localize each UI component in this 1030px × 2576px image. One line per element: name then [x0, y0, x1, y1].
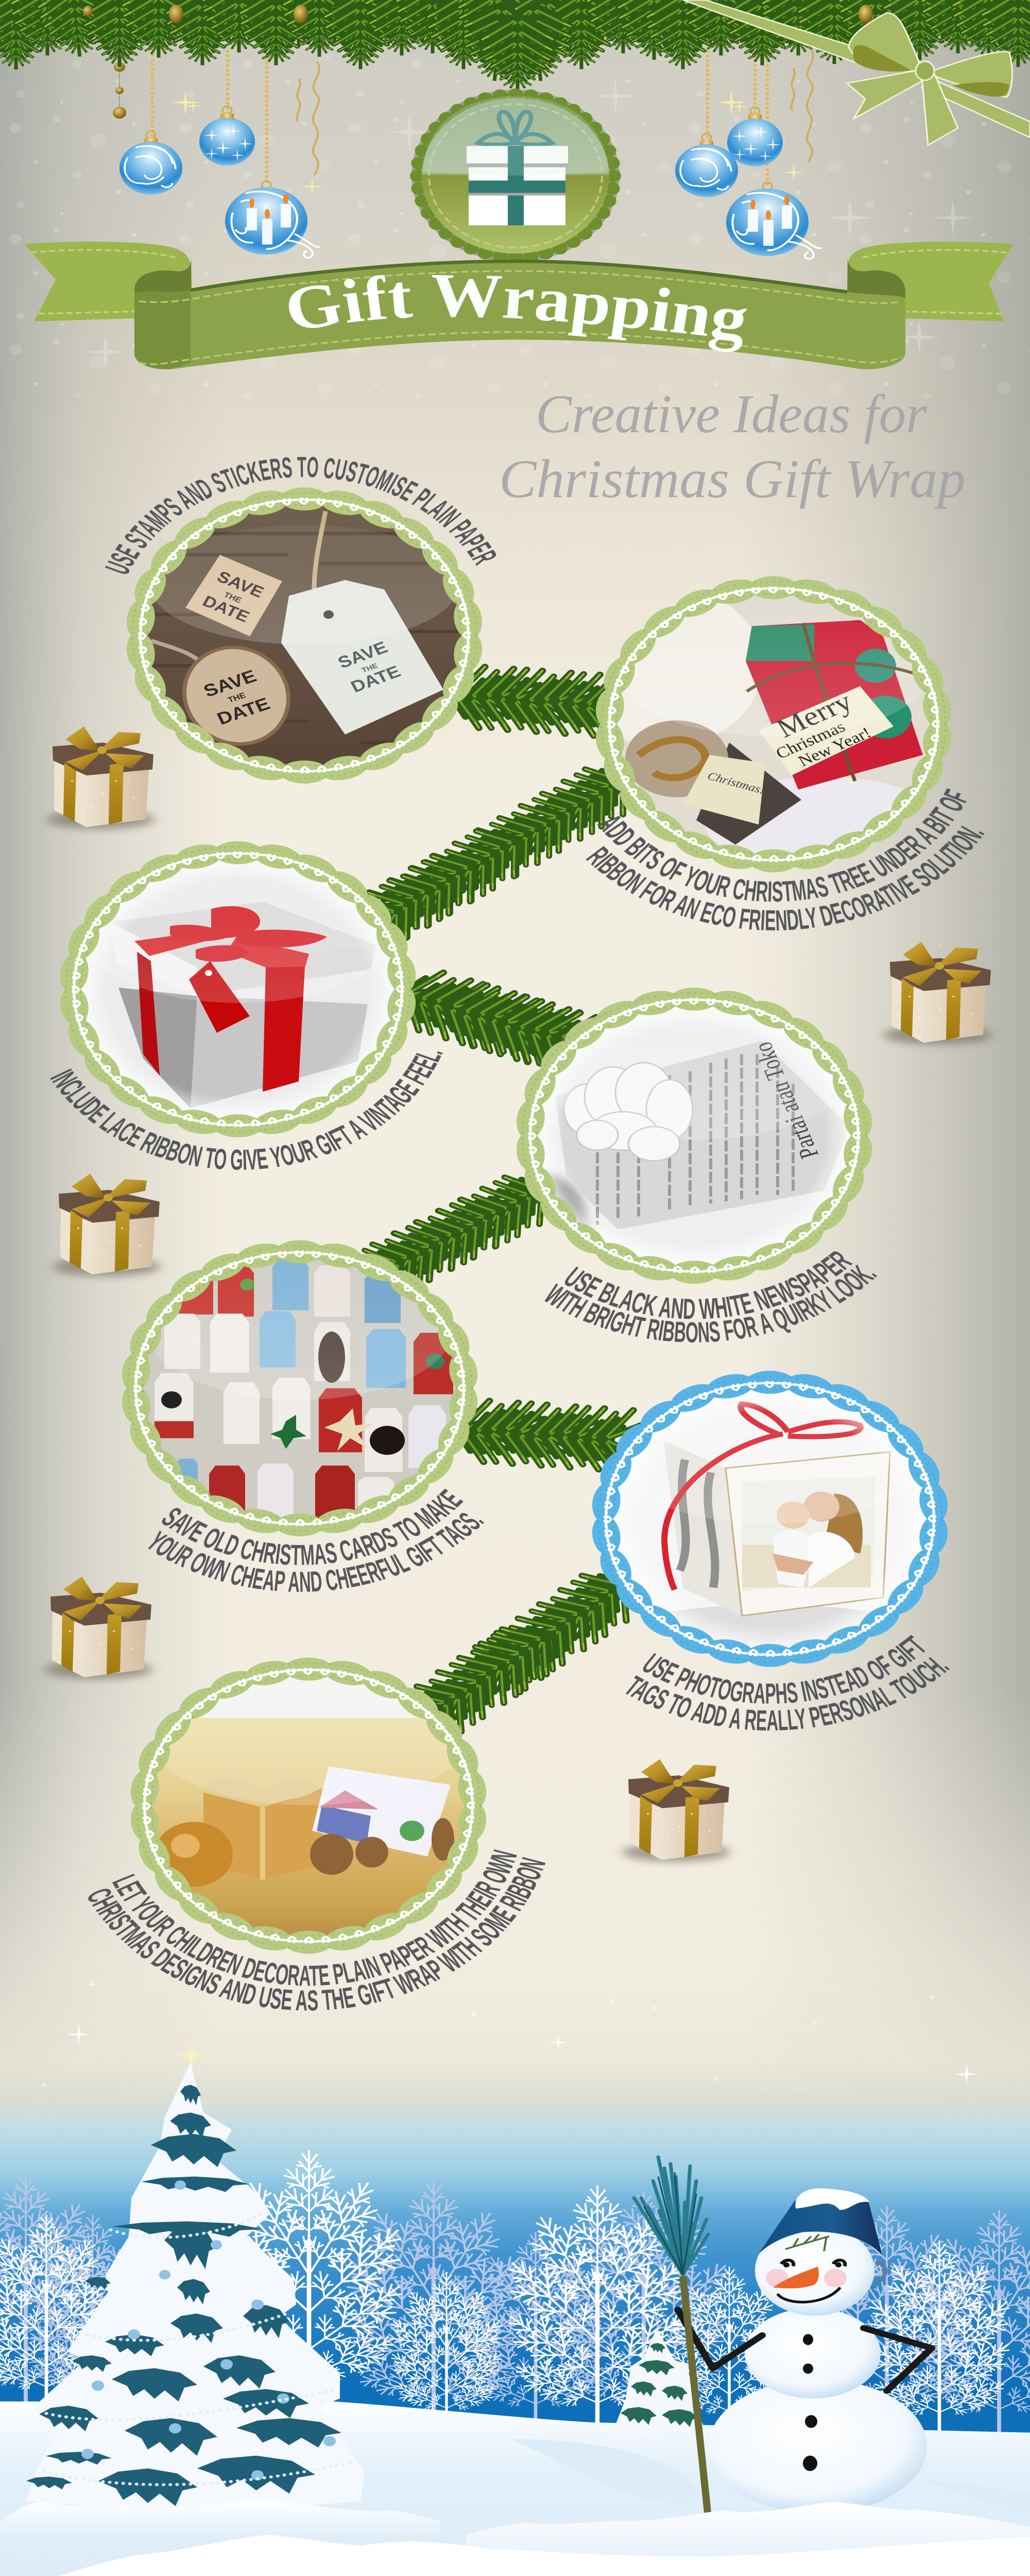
gift 5: [622, 1759, 730, 1861]
ball F: [726, 182, 821, 259]
gift 4: [44, 1577, 152, 1679]
panel 2: Christmas tree bits: [586, 576, 985, 930]
bead strings: [152, 50, 767, 184]
title text: Gift Wrapping: [288, 275, 747, 352]
gold curls: [297, 49, 813, 175]
connector 3 to 4: [390, 964, 632, 1086]
photo: stamped tags on wood: THE: [360, 662, 380, 674]
scalloped ring: [586, 567, 961, 882]
title ribbon: [24, 242, 1014, 369]
band shading: [134, 290, 191, 369]
caption: [538, 1245, 884, 1349]
folds: [134, 256, 192, 325]
photo: stamped tags on wood: SAVE: [200, 666, 260, 701]
broom: [634, 2157, 708, 2513]
medallion body: [392, 74, 639, 278]
caption line 2: RIBBON FOR AN ECO FRIENDLY DECORATIVE SOLUTION.: [586, 825, 985, 930]
photo: red gift with card: Christmas!: [706, 770, 767, 796]
photo: gold gift with child's drawing: [150, 1674, 467, 1937]
subtitle: [499, 384, 966, 509]
caption: [618, 1630, 956, 1737]
caption: [579, 785, 992, 937]
panel 6: photographs: [582, 1362, 957, 1737]
centre drop: [459, 2, 576, 92]
fir branch connectors: [318, 665, 649, 1751]
upper sprig row: [0, 0, 1030, 47]
gift 2: [884, 942, 992, 1044]
caption line 2: TAGS TO ADD A REALLY PERSONAL TOUCH.: [618, 1650, 956, 1737]
caption: USE STAMPS AND STICKERS TO CUSTOMISE PLAIN PAPER: [105, 456, 496, 598]
bead garlands: [44, 2215, 350, 2485]
caption: [140, 1484, 491, 1598]
connector 2 to 3: [318, 756, 646, 967]
photo: stamped tags on wood: DATE: [348, 662, 404, 696]
photo: handmade gift tags: [141, 1255, 458, 1522]
band dark top edge: [191, 261, 847, 292]
photo: stamped tags on wood: DATE: [214, 694, 273, 728]
connector 6 to 7: [389, 1560, 649, 1751]
buttons: [803, 2334, 817, 2471]
caption: INCLUDE LACE RIBBON TO GIVE YOUR GIFT A VINTAGE FEEL.: [50, 1051, 443, 1170]
photo: newspaper wrapped gift: [494, 1004, 853, 1284]
band stitches: [139, 271, 901, 364]
photo: red gift with card: Christmas: [772, 718, 849, 762]
gift icon box: [467, 146, 568, 225]
garland baubles: [83, 5, 873, 24]
photo: newspaper wrapped gift: Partai atau Toko: [748, 1039, 825, 1162]
head: [755, 2225, 874, 2316]
ribbon stripes: [683, 0, 876, 64]
scalloped ring: [507, 978, 882, 1293]
lower sprig row: [0, 0, 1030, 70]
caption line 1: ADD BITS OF YOUR CHRISTMAS TREE UNDER A BIT OF: [597, 788, 966, 902]
caption line 2: CHRISTMAS DESIGNS AND USE AS THE GIFT WRAP WITH SOME RIBBON: [79, 1854, 554, 2017]
stick arms: [678, 2310, 932, 2391]
caption line 1: SAVE OLD CHRISTMAS CARDS TO MAKE: [154, 1484, 470, 1571]
bow loops: [849, 13, 922, 71]
photo: photo cube with ribbon: [611, 1387, 929, 1656]
hanging ornaments: [60, 49, 974, 370]
ball D: [675, 133, 738, 197]
caption line 1: LET YOUR CHILDREN DECORATE PLAIN PAPER WITH THEIR OWN: [105, 1846, 525, 1992]
lavender trees: [0, 2174, 1030, 2433]
medallion with gift icon: [392, 74, 639, 278]
caption line 2: WITH BRIGHT RIBBONS FOR A QUIRKY LOOK.: [538, 1258, 884, 1349]
panel 5: old Christmas cards: [112, 1231, 491, 1598]
ball B: [199, 106, 255, 165]
faint large stars: [60, 78, 974, 370]
photo: stamped tags on wood: SAVE: [214, 568, 267, 601]
scalloped ring: [121, 1648, 496, 1963]
pine sprig on hat: [785, 2234, 829, 2251]
scalloped ring: [117, 478, 492, 793]
face: [766, 2260, 847, 2302]
decorative gift boxes: [44, 726, 992, 1861]
pine garland: [0, 0, 1030, 92]
panel 3: lace ribbon: [50, 841, 443, 1170]
photo: stamped tags on wood: SAVE: [335, 638, 391, 672]
snowy ground: [0, 2401, 1030, 2576]
snow drifts foreground: [0, 2500, 1030, 2576]
white trees: [0, 2150, 1028, 2433]
scalloped ring: [50, 832, 425, 1146]
photo: stamped tags on wood: THE: [222, 590, 244, 605]
scalloped ring: [582, 1362, 957, 1676]
ball C: [225, 181, 320, 258]
body: [709, 2379, 927, 2513]
photo: stamped tags on wood: [146, 504, 463, 767]
scalloped ring: [112, 1231, 487, 1546]
medallion gloss: [423, 96, 608, 176]
large decorated fir tree: [26, 2041, 365, 2510]
photo: red gift with card: New Year!: [795, 724, 874, 770]
panel 7: children's designs: [79, 1648, 554, 2017]
ball E: [727, 107, 783, 166]
panel 1: stamps and stickers: [105, 456, 496, 784]
winter tree line: [0, 2150, 1030, 2433]
centre band: [134, 261, 905, 369]
photo: red gift with card: Merry: [771, 686, 858, 743]
subtitle line 1: Creative Ideas for: [536, 384, 928, 445]
star topper: [175, 2041, 209, 2069]
ground shadows: [510, 2439, 1030, 2518]
panel 4: newspaper: [516, 987, 878, 1343]
teal bough patches: [26, 2085, 341, 2506]
photo: white box with red ribbon: [79, 858, 397, 1121]
baubles on tree: [81, 2180, 336, 2480]
corner ribbon bow: [683, 0, 1030, 145]
gold beads: [113, 62, 126, 118]
photo: stamped tags on wood: DATE: [199, 592, 252, 626]
left tail: [24, 242, 192, 321]
connector 4 to 5: [344, 1165, 563, 1307]
snow-covered silhouette: [26, 2062, 365, 2510]
right tail: [847, 242, 1014, 321]
connector 5 to 6: [453, 1399, 643, 1472]
bucket hat: [758, 2189, 886, 2283]
caption: [79, 1846, 554, 2017]
snowman: [634, 2157, 932, 2513]
photo: red gift with card: [616, 595, 931, 854]
gift icon bow: [478, 112, 552, 145]
ball A: [119, 131, 182, 195]
connector 1 to 2: [448, 665, 638, 738]
gift 3: [53, 1174, 161, 1276]
small fir tree: [611, 2328, 706, 2437]
night sky stars: [39, 1980, 979, 2089]
caption line 1: USE BLACK AND WHITE NEWSPAPER: [557, 1245, 859, 1326]
caption line 2: YOUR OWN CHEAP AND CHEERFUL GIFT TAGS.: [140, 1505, 491, 1598]
tail stitches: [31, 250, 1007, 314]
photo: stamped tags on wood: THE: [226, 690, 247, 704]
gift 1: [46, 726, 154, 829]
sparkles: [170, 90, 804, 195]
caption line 1: USE PHOTOGRAPHS INSTEAD OF GIFT: [636, 1630, 934, 1710]
